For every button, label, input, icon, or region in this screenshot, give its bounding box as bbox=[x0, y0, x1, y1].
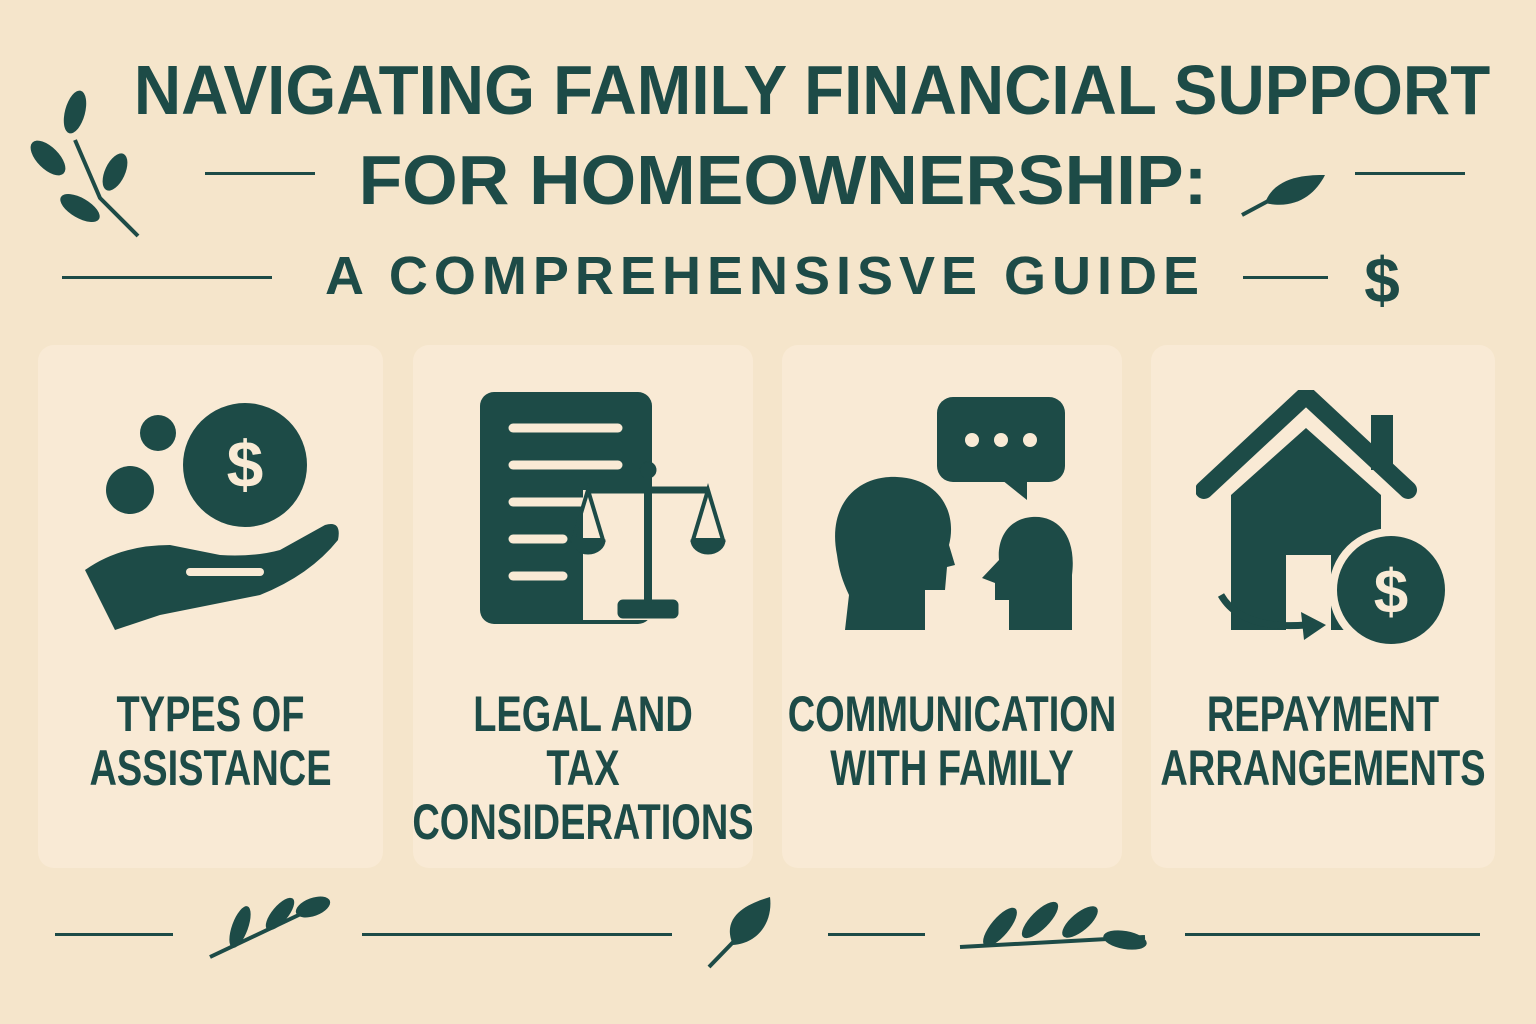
label: ASSISTANCE bbox=[89, 740, 332, 796]
panel: repayment bbox=[1151, 345, 1495, 868]
label bbox=[788, 686, 1116, 796]
label bbox=[412, 686, 754, 850]
icon: house with dollar and arrow bbox=[1196, 390, 1445, 644]
panel: communication bbox=[782, 345, 1122, 868]
icon: heads with speech bubble bbox=[835, 397, 1073, 630]
bottom decorative lines bbox=[55, 933, 173, 936]
icon: leaf branch top-left bbox=[30, 90, 140, 238]
text: FOR HOMEOWNERSHIP: bbox=[359, 141, 1207, 219]
text: $ bbox=[1364, 244, 1400, 316]
icon: hand with coins bbox=[85, 403, 339, 630]
icon: hand with coins: $ bbox=[227, 427, 263, 501]
text: A COMPREHENSISVE GUIDE bbox=[325, 246, 1205, 306]
label: COMMUNICATION bbox=[788, 686, 1116, 742]
label: CONSIDERATIONS bbox=[412, 794, 754, 850]
icon: bottom single leaf bbox=[708, 897, 770, 968]
icon: leaf top-right bbox=[1241, 175, 1325, 217]
label: ARRANGEMENTS bbox=[1160, 740, 1486, 796]
label bbox=[89, 686, 332, 796]
label: TAX bbox=[546, 740, 620, 796]
label: LEGAL AND bbox=[473, 686, 693, 742]
icon: document with scales bbox=[480, 392, 726, 624]
label bbox=[1160, 686, 1486, 796]
icon: bottom leaf branch 1 bbox=[209, 896, 330, 959]
label: REPAYMENT bbox=[1207, 686, 1439, 742]
icon: bottom leaf branch 2 bbox=[960, 902, 1147, 950]
label: WITH FAMILY bbox=[830, 740, 1074, 796]
text: NAVIGATING FAMILY FINANCIAL SUPPORT bbox=[134, 51, 1490, 129]
panel: legal and tax bbox=[413, 345, 753, 868]
panel: types of assistance bbox=[38, 345, 383, 868]
icon: house with dollar and arrow: $ bbox=[1374, 558, 1408, 627]
label: TYPES OF bbox=[117, 686, 304, 742]
